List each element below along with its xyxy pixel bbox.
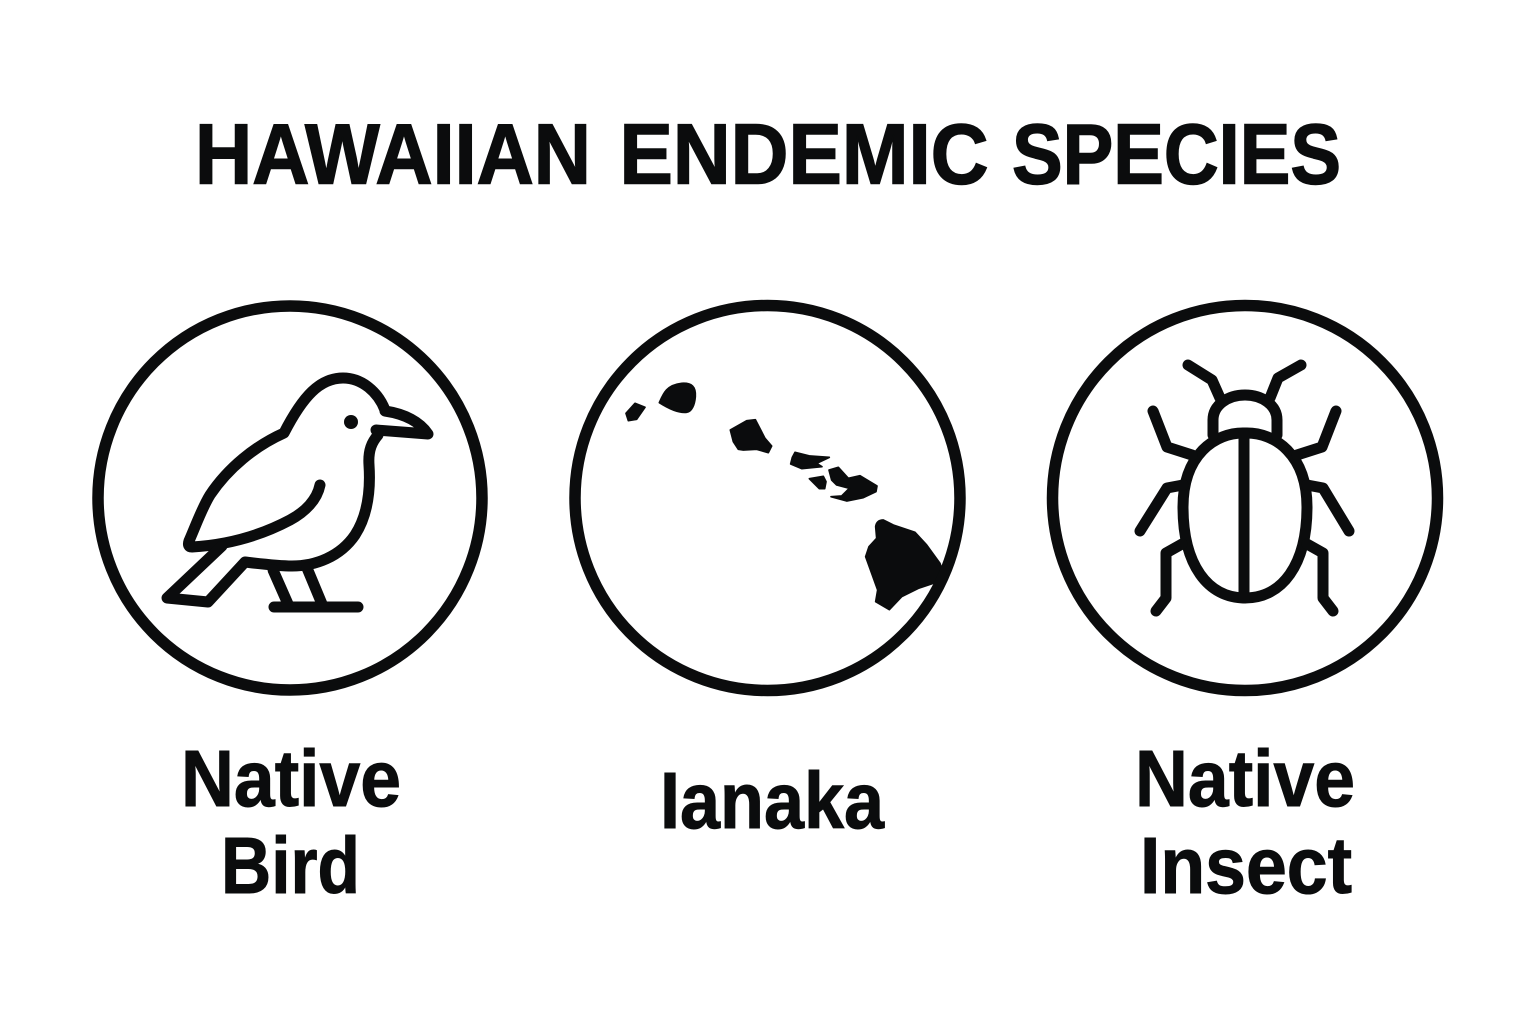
label: Native Bird: Bird xyxy=(221,821,360,910)
title: SPECIES xyxy=(1012,108,1341,202)
label: Native Bird: Native xyxy=(181,734,401,823)
label: Native Bird xyxy=(181,734,401,910)
icon: bird xyxy=(167,378,428,607)
label: Native Insect: Insect xyxy=(1140,821,1352,910)
icon ring: islands xyxy=(575,306,960,690)
title xyxy=(195,108,1341,202)
title: HAWAIIAN xyxy=(195,108,591,202)
icon: beetle xyxy=(1140,365,1349,611)
icon: Hawaiian islands map xyxy=(626,383,943,610)
title: ENDEMIC xyxy=(620,108,988,202)
label: Native Insect xyxy=(1135,734,1355,910)
label: Ianaka: Ianaka xyxy=(660,756,884,845)
label: Native Insect: Native xyxy=(1135,734,1355,823)
panel: native bird xyxy=(98,306,482,690)
icon ring: bird xyxy=(98,306,482,690)
icon ring: insect xyxy=(1052,306,1438,690)
panel: islands xyxy=(575,306,960,690)
panel: native insect xyxy=(1052,306,1438,690)
